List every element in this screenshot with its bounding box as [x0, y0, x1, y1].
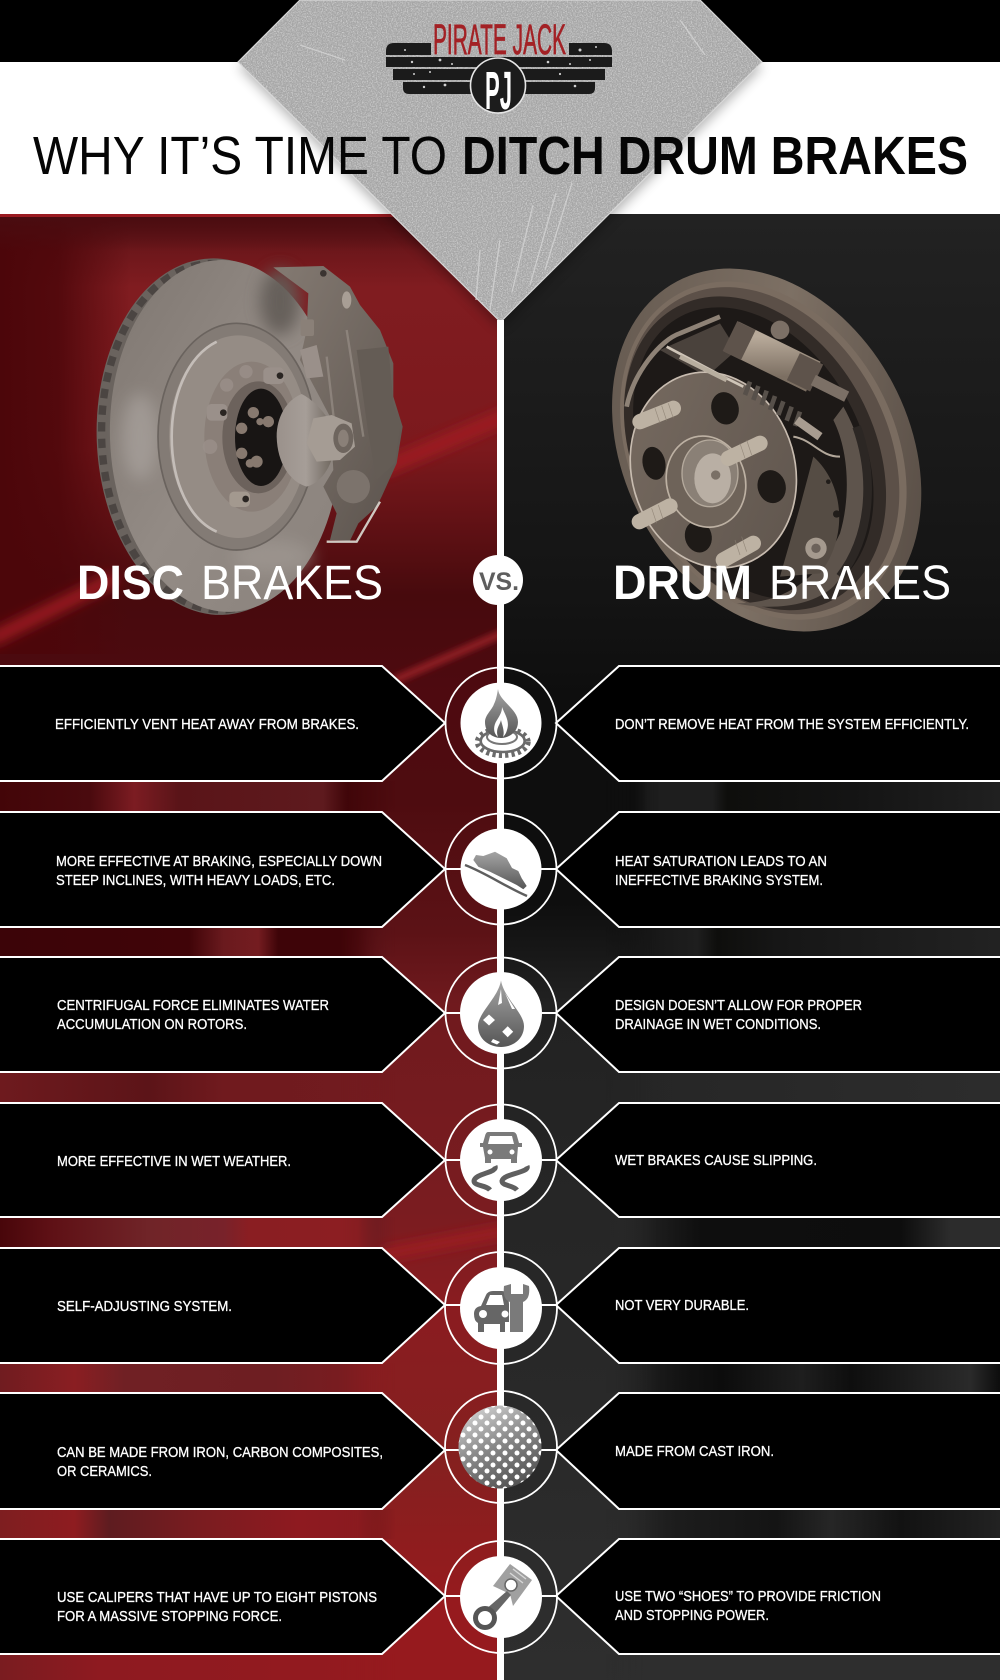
background gaps between rows — [0, 781, 1000, 1680]
center divider — [497, 320, 504, 1680]
rotor wheel studs — [207, 367, 284, 507]
text: right row 6: MADE FROM CAST IRON. — [615, 1444, 774, 1460]
text: left row 1: EFFICIENTLY VENT HEAT AWAY FROM BRAKES. — [55, 717, 359, 733]
concrete diamond — [238, 0, 762, 322]
drum brake illustration — [551, 214, 982, 686]
heading: drum brakes: BRAKES — [769, 557, 951, 610]
text: right row 3 — [615, 998, 862, 1033]
text: left row 3: CENTRIFUGAL FORCE ELIMINATES WATER — [57, 998, 329, 1014]
row rings — [445, 668, 557, 1653]
background: red left side — [0, 214, 520, 1680]
text: left row 2 — [56, 854, 382, 889]
icon: water drop — [460, 972, 542, 1054]
title — [33, 126, 968, 186]
return spring — [745, 382, 800, 426]
logo: Pirate Jack — [386, 16, 612, 121]
text: left row 5: SELF-ADJUSTING SYSTEM. — [57, 1299, 232, 1315]
heading: disc brakes: DISC — [77, 557, 184, 610]
cone and nut — [277, 394, 335, 487]
logo badge: PJ — [485, 61, 512, 121]
text: right row 2: INEFFECTIVE BRAKING SYSTEM. — [615, 873, 823, 889]
text: left row 3: ACCUMULATION ON ROTORS. — [57, 1017, 247, 1033]
text: left row 2: STEEP INCLINES, WITH HEAVY LOADS, ETC. — [56, 873, 335, 889]
concrete diamond shadow — [238, 50, 763, 328]
text: right row 7 — [615, 1589, 881, 1624]
logo: Pirate Jack: PIRATE JACK — [433, 16, 566, 64]
wheel cylinder — [732, 337, 813, 377]
text: right row 2 — [615, 854, 827, 889]
text: right row 5: NOT VERY DURABLE. — [615, 1298, 749, 1314]
background: dark right side — [504, 214, 1000, 1680]
text: right row 7: USE TWO “SHOES” TO PROVIDE FRICTION — [615, 1589, 881, 1605]
caliper — [273, 266, 403, 541]
icon: flame over gear — [460, 682, 542, 764]
heading: disc brakes: BRAKES — [201, 557, 383, 610]
text: right row 7: AND STOPPING POWER. — [615, 1608, 769, 1624]
heading: drum brakes — [613, 557, 951, 610]
vs badge — [473, 555, 523, 605]
text: left row 2: MORE EFFECTIVE AT BRAKING, ESPECIALLY DOWN — [56, 854, 382, 870]
text: left row 6: CAN BE MADE FROM IRON, CARBON COMPOSITES, — [57, 1445, 383, 1461]
icon: halftone metal disc — [458, 1406, 542, 1488]
heading: drum brakes: DRUM — [613, 557, 752, 610]
text: right row 4: WET BRAKES CAUSE SLIPPING. — [615, 1153, 817, 1169]
icon: piston — [460, 1556, 542, 1638]
heading: disc brakes — [77, 557, 383, 610]
hub plate — [608, 352, 819, 588]
logo badge — [470, 58, 526, 121]
text: left row 7: FOR A MASSIVE STOPPING FORCE. — [57, 1609, 282, 1625]
text: left row 3 — [57, 998, 329, 1033]
text: right row 2: HEAT SATURATION LEADS TO AN — [615, 854, 827, 870]
white title band — [0, 62, 1000, 214]
text: left row 7: USE CALIPERS THAT HAVE UP TO EIGHT PISTONS — [57, 1590, 377, 1606]
vs badge: VS. — [479, 568, 519, 596]
panels: left column — [0, 666, 445, 1654]
title: WHY IT’S TIME TO — [33, 126, 447, 186]
icon: car and wrench — [460, 1267, 542, 1349]
text: left row 6 — [57, 1445, 383, 1480]
text: right row 3: DESIGN DOESN’T ALLOW FOR PROPER — [615, 998, 862, 1014]
text: left row 4: MORE EFFECTIVE IN WET WEATHER. — [57, 1154, 291, 1170]
logo speckles — [404, 46, 597, 88]
panels: right column — [556, 666, 1000, 1654]
text: left row 6: OR CERAMICS. — [57, 1464, 152, 1480]
disc brake illustration — [91, 254, 403, 619]
logo wings — [386, 43, 612, 94]
wheel studs — [639, 408, 760, 560]
text: right row 1: DON’T REMOVE HEAT FROM THE SYSTEM EFFICIENTLY. — [615, 717, 969, 733]
text: right row 3: DRAINAGE IN WET CONDITIONS. — [615, 1017, 821, 1033]
text: left row 7 — [57, 1590, 377, 1625]
icon: car on steep slope — [460, 828, 542, 910]
icon: skidding car — [460, 1119, 542, 1201]
black top band — [0, 0, 1000, 62]
